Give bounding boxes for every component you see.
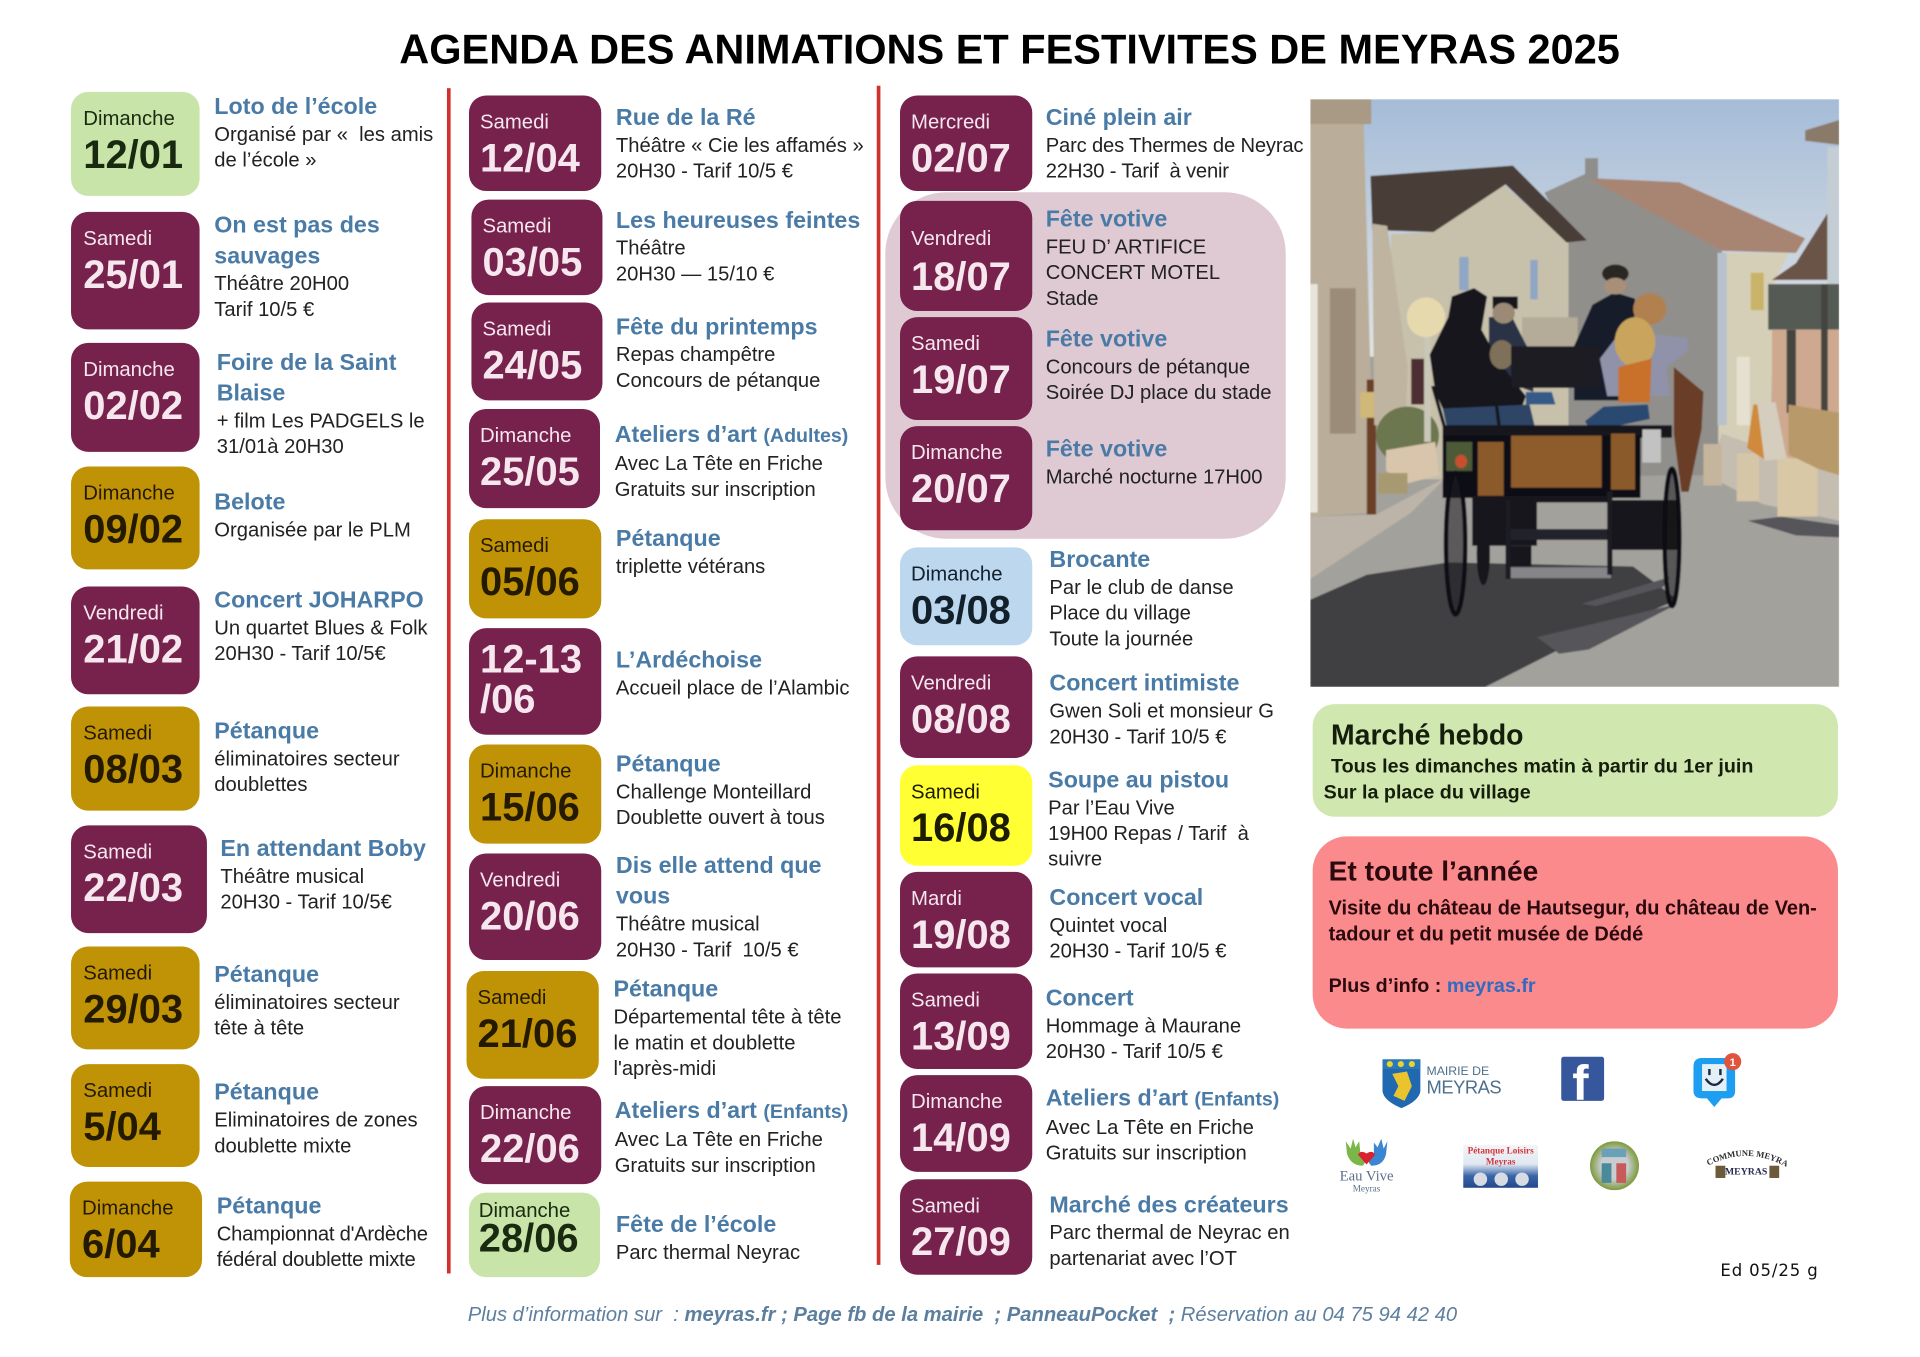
event text: Challenge Monteillard xyxy=(616,781,811,803)
event: Pétanque 05/06 xyxy=(468,519,765,618)
logo: Pétanque Loisirs Meyras xyxy=(1463,1145,1538,1188)
date badge xyxy=(900,973,1032,1069)
date badge: 16/08 xyxy=(911,804,1011,849)
date badge: 08/08 xyxy=(911,695,1011,740)
event text: Par l’Eau Vive xyxy=(1048,797,1175,819)
event text: suivre xyxy=(1048,848,1102,870)
date badge: 02/07 xyxy=(911,134,1011,179)
date badge: /06 xyxy=(480,675,535,721)
date badge: Samedi xyxy=(482,317,551,340)
event text: Théâtre 20H00 xyxy=(214,272,349,294)
event text: Stade xyxy=(1046,287,1099,309)
panel: fête votive highlight xyxy=(885,192,1286,539)
event text: Théâtre xyxy=(616,237,686,259)
date badge xyxy=(71,212,200,329)
date badge xyxy=(469,519,601,618)
icon: hands and heart xyxy=(1343,1139,1390,1167)
date badge: 19/08 xyxy=(911,910,1011,956)
photo: horse-drawn carriage in the village xyxy=(1310,99,1839,687)
event text: Ateliers d’art (Enfants) xyxy=(1046,1086,1279,1111)
date badge: 25/01 xyxy=(83,250,183,296)
event text xyxy=(214,1079,418,1157)
date badge: Samedi xyxy=(83,961,152,984)
event text: Gratuits sur inscription xyxy=(615,1154,816,1176)
event text: + film Les PADGELS le xyxy=(217,410,425,432)
date badge: 19/07 xyxy=(911,356,1011,401)
event: Ciné plein air xyxy=(900,96,1308,191)
date badge xyxy=(469,96,601,191)
date badge xyxy=(900,201,1032,311)
event text: sauvages xyxy=(214,243,320,269)
date badge xyxy=(900,547,1032,645)
event: Belote xyxy=(71,466,411,570)
event: Concert intimiste xyxy=(900,656,1298,758)
date badge: 03/05 xyxy=(482,238,582,283)
event text xyxy=(613,977,841,1079)
event text: Fête votive xyxy=(1046,437,1167,462)
date badge xyxy=(71,467,200,569)
event text xyxy=(1046,434,1262,490)
logo text: Eau Vive xyxy=(1340,1167,1394,1184)
date badge xyxy=(469,409,600,508)
date badge: Dimanche xyxy=(480,423,571,446)
event: On est pas des sauvages xyxy=(71,212,380,330)
event text: doublettes xyxy=(214,773,308,795)
date badge: Samedi xyxy=(911,988,980,1011)
date badge: 29/03 xyxy=(83,985,183,1030)
event text: Pétanque xyxy=(616,751,721,777)
event text: Marché nocturne 17H00 xyxy=(1046,466,1262,488)
event text: Avec La Tête en Friche xyxy=(615,1128,823,1150)
date badge xyxy=(71,825,207,933)
icon: PanneauPocket: 1 xyxy=(1730,1057,1736,1069)
text block: Visite du château de Hautsegur, du château de Ven- xyxy=(1329,898,1817,920)
date badge: Dimanche xyxy=(911,561,1003,585)
event text: Dis elle attend que xyxy=(616,853,821,879)
date badge xyxy=(469,1086,601,1184)
date badge: 25/05 xyxy=(480,448,580,493)
event text: 20H30 - Tarif 10/5€ xyxy=(214,642,386,664)
event text: 20H30 - Tarif 10/5 € xyxy=(1046,1040,1223,1062)
date badge: Samedi xyxy=(83,226,152,249)
date badge xyxy=(900,96,1032,191)
event text: Doublette ouvert à tous xyxy=(616,806,825,828)
event: Rue de la Ré xyxy=(468,96,864,191)
date badge: 13/09 xyxy=(911,1012,1011,1057)
logo: Comité des fêtes de Meyras: MEYRAS xyxy=(1725,1166,1768,1177)
event text: 20H30 - Tarif 10/5 € xyxy=(616,160,793,182)
date badge xyxy=(469,853,601,960)
event text: Théâtre musical xyxy=(220,865,364,887)
event text xyxy=(616,526,765,577)
event text: On est pas des xyxy=(214,212,380,238)
event text: Concert xyxy=(1046,985,1134,1011)
logo text xyxy=(1427,1065,1501,1098)
date badge: 12/04 xyxy=(480,134,580,179)
logo: école round badge xyxy=(1589,1141,1640,1190)
event text: Accueil place de l’Alambic xyxy=(616,677,850,699)
event text: partenariat avec l’OT xyxy=(1049,1247,1237,1269)
event text: Loto de l’école xyxy=(214,94,377,119)
date badge: Samedi xyxy=(480,533,549,557)
date badge: 20/06 xyxy=(480,892,580,937)
event: Dis elle attend que vous xyxy=(468,853,821,961)
event text xyxy=(1046,1083,1279,1166)
event: L'Ardéchoise xyxy=(468,628,850,735)
event text xyxy=(616,751,825,828)
date badge xyxy=(467,971,599,1079)
event text: éliminatoires secteur xyxy=(214,748,400,770)
logo: Mairie de Meyras xyxy=(1382,1059,1500,1108)
date badge: Samedi xyxy=(911,1193,980,1217)
event text: Concours de pétanque xyxy=(1046,356,1250,378)
panel: Marché hebdo xyxy=(1313,704,1838,817)
icon: PanneauPocket xyxy=(1691,1052,1742,1113)
event text xyxy=(217,350,425,457)
icon: Facebook xyxy=(1561,1057,1604,1101)
date badge: Samedi xyxy=(83,839,152,863)
date badge: Mercredi xyxy=(911,110,990,133)
event text: Blaise xyxy=(217,380,285,406)
date badge xyxy=(469,1193,600,1277)
event text xyxy=(214,94,433,171)
event text: tête à tête xyxy=(214,1017,304,1039)
event text: triplette vétérans xyxy=(616,555,765,577)
date badge xyxy=(900,765,1032,866)
event text: 31/01à 20H30 xyxy=(217,435,344,457)
date badge: 12-13 xyxy=(480,635,582,680)
event text: 19H00 Repas / Tarif à xyxy=(1048,822,1249,844)
event text: 20H30 - Tarif 10/5€ xyxy=(220,891,392,913)
event: Soupe au pistou xyxy=(900,765,1298,866)
event: Fête votive 19/07 xyxy=(900,317,1280,420)
text block xyxy=(1329,896,1817,948)
event text xyxy=(616,647,850,699)
event text xyxy=(614,1098,848,1176)
event: Brocante xyxy=(900,547,1298,645)
date badge xyxy=(900,1179,1032,1275)
event: Loto de l'école xyxy=(71,92,433,196)
event text: Concert JOHARPO xyxy=(214,587,424,613)
event text xyxy=(217,1193,428,1270)
event: Foire de la Saint Blaise xyxy=(71,342,425,457)
event: Ateliers d'art adultes xyxy=(468,409,848,508)
date badge: 05/06 xyxy=(480,558,580,603)
event text xyxy=(1046,324,1271,406)
event text: L’Ardéchoise xyxy=(616,647,762,673)
date badge: Vendredi xyxy=(911,226,991,249)
date badge: Dimanche xyxy=(911,440,1003,463)
date badge xyxy=(70,1182,202,1277)
event: Fête votive 18/07 xyxy=(900,201,1280,311)
event: Ateliers d'art enfants 14/09 xyxy=(900,1075,1298,1172)
date badge: Dimanche xyxy=(480,1100,571,1123)
event text: Avec La Tête en Friche xyxy=(615,452,823,474)
event text: Quintet vocal xyxy=(1049,914,1167,936)
event text: 20H30 — 15/10 € xyxy=(616,263,774,285)
event text: 22H30 - Tarif à venir xyxy=(1046,160,1229,182)
event text: Hommage à Maurane xyxy=(1046,1014,1241,1037)
date badge: 08/03 xyxy=(83,745,183,790)
event text: Pétanque xyxy=(613,977,718,1002)
event text: Parc thermal Neyrac xyxy=(616,1241,800,1263)
event text xyxy=(220,836,426,913)
date badge: 03/08 xyxy=(911,586,1011,631)
date badge: Samedi xyxy=(482,214,551,237)
date badge: 22/06 xyxy=(480,1125,580,1170)
event text: Ciné plein air xyxy=(1046,105,1192,130)
event text: Eliminatoires de zones xyxy=(214,1109,418,1131)
event text: Fête de l’école xyxy=(616,1212,776,1237)
event text: l'après-midi xyxy=(613,1057,716,1079)
event text: Repas champêtre xyxy=(616,343,775,366)
event text xyxy=(1049,1190,1290,1272)
date badge: Mardi xyxy=(911,886,962,909)
event text: Belote xyxy=(214,489,285,515)
edition note: Ed 05/25 g xyxy=(1720,1261,1819,1281)
event text: Les heureuses feintes xyxy=(616,208,860,233)
event text: Pétanque xyxy=(217,1193,321,1219)
event text: Parc des Thermes de Neyrac xyxy=(1046,134,1303,156)
event text xyxy=(1049,668,1274,750)
date badge: Samedi xyxy=(480,110,549,133)
event text: CONCERT MOTEL xyxy=(1046,261,1220,283)
date badge xyxy=(71,343,200,452)
date badge: Dimanche xyxy=(82,1196,174,1219)
event text xyxy=(616,208,860,285)
event: Concert Joharpo xyxy=(71,586,428,694)
event: Fête votive 20/07 xyxy=(900,426,1280,530)
footer: Plus d’information sur : meyras.fr ; Page fb de la mairie ; PanneauPocket ; Réservation au 04 75 94 42 40 xyxy=(468,1304,1457,1326)
event text xyxy=(214,962,400,1039)
date badge: 15/06 xyxy=(480,783,580,828)
event text: Gratuits sur inscription xyxy=(615,478,816,500)
date badge: Dimanche xyxy=(911,1089,1003,1112)
date badge xyxy=(900,1075,1032,1172)
event text: Toute la journée xyxy=(1049,628,1193,650)
logo: Pétanque Loisirs Meyras: Pétanque Loisirs xyxy=(1468,1145,1534,1156)
event text: Brocante xyxy=(1049,547,1150,572)
event text xyxy=(1046,204,1220,312)
date badge xyxy=(471,200,602,295)
event text: Ateliers d’art (Enfants) xyxy=(615,1098,848,1123)
event: En attendant Boby xyxy=(71,825,426,934)
date badge: 18/07 xyxy=(911,253,1011,298)
date badge: 20/07 xyxy=(911,465,1011,510)
date badge xyxy=(471,302,602,400)
event text xyxy=(214,489,411,541)
date badge xyxy=(900,426,1032,530)
logo text: Meyras xyxy=(1353,1183,1380,1194)
event: Pétanque 29/03 xyxy=(71,946,400,1050)
date badge: Dimanche xyxy=(83,106,175,129)
event text xyxy=(616,314,820,391)
event text: le matin et doublette xyxy=(613,1032,795,1054)
event: Les heureuses feintes xyxy=(471,200,860,296)
date badge: 5/04 xyxy=(83,1103,161,1148)
date badge xyxy=(900,317,1032,420)
event text: vous xyxy=(616,883,670,909)
date badge: 27/09 xyxy=(911,1218,1011,1263)
date badge xyxy=(71,707,200,811)
date badge xyxy=(900,872,1032,967)
logo text: MAIRIE DE xyxy=(1427,1065,1489,1079)
event text xyxy=(616,105,864,182)
event text: Pétanque xyxy=(214,718,319,744)
date badge: Vendredi xyxy=(83,601,163,624)
date badge: Dimanche xyxy=(479,1198,570,1221)
date badge: Dimanche xyxy=(83,357,175,380)
date badge: Vendredi xyxy=(911,670,991,694)
event text: Pétanque xyxy=(214,1079,319,1105)
event text xyxy=(214,587,428,664)
date badge xyxy=(71,587,200,694)
text block: Tous les dimanches matin à partir du 1er juin xyxy=(1331,756,1753,778)
date badge: 28/06 xyxy=(479,1214,579,1259)
date badge: 12/01 xyxy=(83,130,183,176)
event text: Rue de la Ré xyxy=(616,105,756,130)
event text: Organisée par le PLM xyxy=(214,519,411,541)
date badge xyxy=(71,947,200,1049)
date badge: Samedi xyxy=(83,721,152,744)
panel: Et toute l'année xyxy=(1313,836,1838,1029)
heading: Et toute l’année xyxy=(1329,855,1538,887)
logo text xyxy=(1340,1168,1393,1195)
heading: Marché hebdo xyxy=(1331,719,1524,751)
date badge: 09/02 xyxy=(83,505,183,550)
date badge xyxy=(900,656,1032,758)
event text: Concert intimiste xyxy=(1049,670,1239,696)
event text: doublette mixte xyxy=(214,1134,351,1157)
logo: Comité des fêtes de Meyras xyxy=(1706,1149,1787,1183)
event text: éliminatoires secteur xyxy=(214,991,400,1013)
title: AGENDA DES ANIMATIONS ET FESTIVITES DE MEYRAS 2025 xyxy=(399,27,1620,73)
event: Pétanque 21/06 xyxy=(466,971,841,1079)
logo text: MEYRAS xyxy=(1427,1078,1501,1098)
event text xyxy=(1046,102,1303,184)
date badge: Dimanche xyxy=(480,759,571,782)
event text: Concert vocal xyxy=(1049,885,1203,910)
event: Marché des créateurs xyxy=(900,1179,1298,1275)
event text xyxy=(616,853,821,961)
date badge xyxy=(71,92,200,196)
event: Concert Maurane xyxy=(900,973,1298,1069)
icon: coat of arms xyxy=(1382,1059,1420,1108)
date badge: Vendredi xyxy=(480,868,560,891)
event text: Départemental tête à tête xyxy=(613,1006,841,1028)
date badge: Samedi xyxy=(83,1078,152,1101)
event text: Par le club de danse xyxy=(1049,576,1234,598)
event text: Pétanque xyxy=(616,526,721,552)
event text: Fête du printemps xyxy=(616,314,818,340)
event text xyxy=(1049,544,1234,652)
event text xyxy=(614,422,848,500)
event: Fête de l'école xyxy=(469,1193,867,1277)
event text: Place du village xyxy=(1049,602,1191,624)
event text xyxy=(616,1209,800,1266)
date badge: 21/02 xyxy=(83,625,183,670)
logo: Pétanque Loisirs Meyras: Meyras xyxy=(1486,1156,1515,1167)
date badge: Samedi xyxy=(911,331,980,354)
event text: Avec La Tête en Friche xyxy=(1046,1116,1254,1138)
event: Fête du printemps xyxy=(471,302,820,400)
date badge: Dimanche xyxy=(83,481,175,504)
event text: Tarif 10/5 € xyxy=(214,298,314,320)
event text: 20H30 - Tarif 10/5 € xyxy=(1049,726,1226,748)
event text: Organisé par « les amis xyxy=(214,123,433,145)
event text: Pétanque xyxy=(214,962,319,988)
event text: Gratuits sur inscription xyxy=(1046,1142,1247,1164)
event text xyxy=(214,212,380,320)
date badge: 22/03 xyxy=(83,864,183,909)
event: Pétanque 15/06 xyxy=(468,744,825,844)
event text: Gwen Soli et monsieur G xyxy=(1049,700,1274,722)
date badge xyxy=(469,744,601,844)
event text: Championnat d'Ardèche xyxy=(217,1223,428,1245)
date badge: 6/04 xyxy=(82,1220,160,1266)
event: Pétanque 5/04 xyxy=(71,1064,418,1167)
event text: En attendant Boby xyxy=(220,836,426,861)
event text: 20H30 - Tarif 10/5 € xyxy=(616,939,799,961)
event text: Parc thermal de Neyrac en xyxy=(1049,1221,1290,1243)
event text: Ateliers d’art (Adultes) xyxy=(615,422,848,448)
logo: Eau Vive Meyras xyxy=(1340,1139,1393,1195)
event text: Théâtre musical xyxy=(616,913,760,935)
event text: Fête votive xyxy=(1046,326,1167,352)
event text: 20H30 - Tarif 10/5 € xyxy=(1049,940,1226,962)
text block: Sur la place du village xyxy=(1324,781,1531,803)
text block: tadour et du petit musée de Dédé xyxy=(1329,923,1643,945)
event text: Un quartet Blues & Folk xyxy=(214,617,428,639)
date badge: 14/09 xyxy=(911,1114,1011,1159)
date badge xyxy=(71,1064,200,1167)
event text: Concours de pétanque xyxy=(616,369,820,391)
event text xyxy=(1049,882,1226,964)
event text: fédéral doublette mixte xyxy=(217,1248,416,1270)
event: Ateliers d'art enfants xyxy=(468,1086,848,1184)
link line: Plus d’info : meyras.fr xyxy=(1329,975,1536,997)
event text: Foire de la Saint xyxy=(217,350,396,375)
date badge: Samedi xyxy=(478,985,546,1008)
event text: de l’école » xyxy=(214,149,317,171)
event text: Soupe au pistou xyxy=(1048,767,1229,793)
event text: Soirée DJ place du stade xyxy=(1046,381,1271,403)
event: Concert vocal xyxy=(900,872,1298,967)
date badge: 02/02 xyxy=(83,381,183,427)
event text: FEU D’ ARTIFICE xyxy=(1046,236,1206,258)
date badge xyxy=(469,628,601,735)
event text: Marché des créateurs xyxy=(1049,1192,1289,1218)
date badge: 24/05 xyxy=(482,341,582,386)
event text: Théâtre « Cie les affamés » xyxy=(616,134,864,156)
date badge: 21/06 xyxy=(478,1010,577,1055)
text block xyxy=(1324,754,1753,806)
event: Pétanque 08/03 xyxy=(71,706,400,811)
date badge: Samedi xyxy=(911,779,980,803)
event text xyxy=(214,718,400,795)
event: Pétanque 6/04 xyxy=(70,1182,428,1278)
event text xyxy=(1048,765,1249,872)
event text: Fête votive xyxy=(1046,206,1167,232)
event text xyxy=(1046,983,1241,1065)
